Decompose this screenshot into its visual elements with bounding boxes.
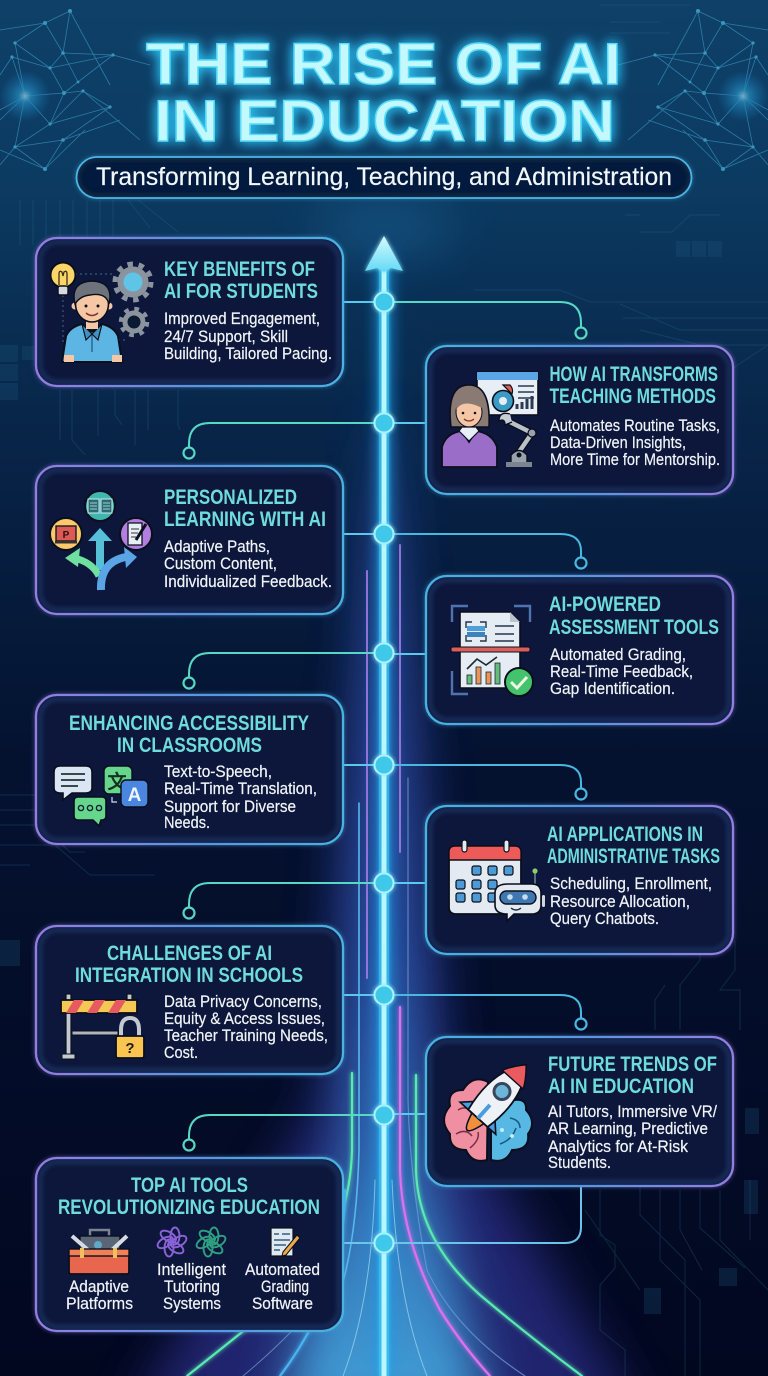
body text: Data Privacy Concerns, — [164, 992, 322, 1011]
icon: brain and rocket — [444, 1049, 544, 1161]
body text: AI Tutors, Immersive VR/ — [548, 1102, 717, 1121]
icon: scanned document with chart and check — [451, 606, 533, 696]
heading: REVOLUTIONIZING EDUCATION — [58, 1196, 320, 1219]
tool: automated grading software: Software — [252, 1294, 313, 1313]
panel: challenges of integration — [36, 926, 343, 1074]
panel: key benefits for students — [36, 238, 343, 386]
icon: barrier and padlock — [61, 994, 144, 1059]
heading: PERSONALIZED — [164, 486, 297, 509]
tool: intelligent tutoring systems: Tutoring — [164, 1277, 220, 1296]
body text — [550, 645, 693, 698]
body text: Teacher Training Needs, — [164, 1026, 328, 1045]
heading: TOP AI TOOLS — [131, 1174, 248, 1197]
body text: Automates Routine Tasks, — [550, 416, 720, 435]
subtitle pill: Transforming Learning, Teaching, and Administration — [96, 163, 672, 191]
body text: Students. — [548, 1153, 611, 1172]
panel: personalized learning — [36, 466, 343, 614]
heading: IN CLASSROOMS — [117, 734, 262, 757]
body text — [164, 762, 317, 832]
heading: INTEGRATION IN SCHOOLS — [75, 964, 303, 987]
body text: Resource Allocation, — [550, 892, 690, 911]
body text: Support for Diverse — [164, 797, 296, 816]
body text: Adaptive Paths, — [164, 537, 270, 556]
icon: speech bubbles and translation: 文 — [107, 770, 127, 793]
title: IN EDUCATION — [154, 89, 615, 154]
side light streaks — [187, 545, 582, 1376]
body text: Needs. — [164, 813, 210, 832]
heading: AI FOR STUDENTS — [164, 280, 318, 303]
body text: Cost. — [164, 1043, 198, 1062]
body text: Data-Driven Insights, — [550, 433, 686, 452]
icon: branching learning paths — [50, 491, 152, 590]
heading — [548, 1053, 717, 1098]
heading: AI-POWERED — [549, 593, 661, 616]
body text: Equity & Access Issues, — [164, 1009, 325, 1028]
body text — [164, 309, 332, 363]
body text: Individualized Feedback. — [164, 572, 332, 591]
heading: KEY BENEFITS OF — [164, 258, 315, 281]
heading — [75, 942, 303, 987]
heading — [164, 258, 318, 303]
heading — [58, 1174, 320, 1219]
icon: barrier and padlock: ? — [125, 1040, 135, 1057]
body text: AR Learning, Predictive — [548, 1119, 708, 1138]
heading: TEACHING METHODS — [550, 385, 716, 408]
body text: More Time for Mentorship. — [550, 450, 720, 469]
heading — [164, 486, 326, 531]
heading — [549, 593, 719, 639]
icon: speech bubbles and translation — [54, 766, 148, 826]
title — [146, 32, 621, 154]
body text: Improved Engagement, — [164, 309, 320, 328]
body text: Analytics for At-Risk — [548, 1137, 688, 1156]
panel: how AI transforms teaching — [426, 346, 733, 494]
heading — [547, 823, 720, 868]
body text: Text-to-Speech, — [164, 762, 272, 781]
body text: Automated Grading, — [550, 645, 686, 664]
arrowhead — [365, 236, 403, 272]
heading: AI IN EDUCATION — [548, 1075, 694, 1098]
body text: Gap Identification. — [550, 679, 675, 698]
tool: adaptive platforms: Platforms — [66, 1294, 133, 1313]
heading: AI APPLICATIONS IN — [547, 823, 703, 846]
tool: intelligent tutoring systems: Intelligent — [157, 1260, 226, 1279]
body text: Scheduling, Enrollment, — [550, 874, 712, 893]
panel: top AI tools — [36, 1158, 343, 1331]
body text — [164, 992, 328, 1062]
neural network right — [618, 9, 768, 171]
icon: student with bulb and gears — [50, 262, 151, 362]
connector lines — [184, 302, 586, 1243]
body text — [548, 1102, 717, 1172]
panel: assessment tools — [426, 576, 733, 724]
subtitle pill — [76, 157, 692, 198]
icon: graded document and pencil — [271, 1228, 300, 1256]
heading: FUTURE TRENDS OF — [548, 1053, 717, 1076]
central spine with arrow and nodes — [365, 236, 403, 1376]
heading — [550, 363, 718, 408]
body text: Building, Tailored Pacing. — [164, 344, 332, 363]
body text — [164, 537, 332, 591]
body text: Custom Content, — [164, 554, 277, 573]
icon: calendar and chatbot — [449, 840, 545, 921]
body text: 24/7 Support, Skill — [164, 327, 288, 346]
body text: Real-Time Feedback, — [550, 662, 693, 681]
tool: adaptive platforms — [66, 1230, 133, 1313]
icon: branching learning paths: P — [63, 530, 70, 541]
panel: administrative tasks — [426, 806, 733, 954]
body text — [550, 874, 712, 928]
tool: intelligent tutoring systems: Systems — [163, 1294, 221, 1313]
tool: automated grading software — [245, 1228, 320, 1313]
icon: speech bubbles and translation: A — [128, 785, 142, 806]
body text: Query Chatbots. — [550, 909, 659, 928]
heading: CHALLENGES OF AI — [107, 942, 272, 965]
icon: teacher with dashboard and robot arm — [442, 372, 538, 467]
heading — [69, 712, 309, 757]
tool: intelligent tutoring systems — [156, 1228, 227, 1313]
tool: adaptive platforms: Adaptive — [69, 1277, 129, 1296]
tool: automated grading software: Grading — [261, 1277, 309, 1296]
neural network left — [0, 9, 150, 171]
title: THE RISE OF AI — [146, 32, 621, 97]
body text — [550, 416, 720, 469]
heading: ASSESSMENT TOOLS — [549, 616, 719, 639]
heading: ENHANCING ACCESSIBILITY — [69, 712, 309, 735]
panel: enhancing accessibility — [36, 695, 343, 844]
panel: future trends — [426, 1037, 733, 1186]
icon: two knot logos — [156, 1228, 227, 1256]
icon: toolbox — [69, 1230, 129, 1274]
tool: automated grading software: Automated — [245, 1260, 320, 1279]
heading: LEARNING WITH AI — [164, 508, 326, 531]
body text: Real-Time Translation, — [164, 779, 317, 798]
